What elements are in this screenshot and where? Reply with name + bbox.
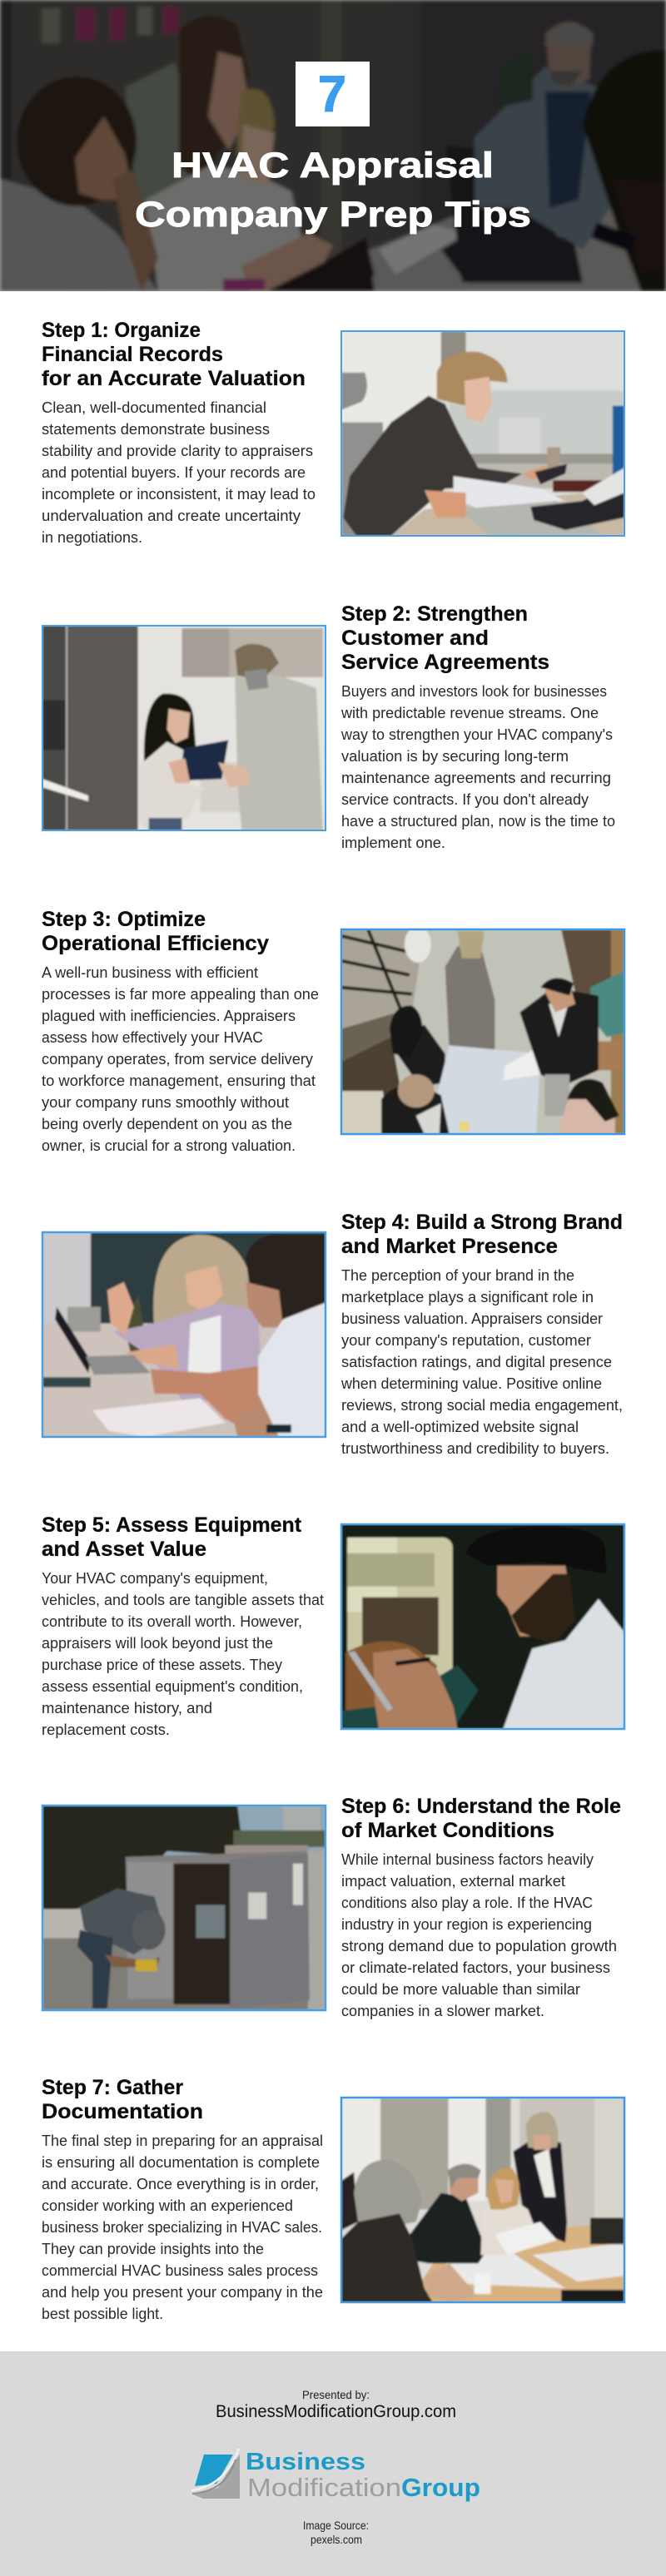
step 2 text: have a structured plan, now is the time to — [341, 813, 615, 830]
step 4 text: when determining value. Positive online — [340, 1375, 602, 1392]
step 6 heading: of Market Conditions — [341, 1819, 554, 1842]
logo: Business Modification Group: Modification — [247, 2473, 401, 2502]
step 5 text: appraisers will look beyond just the — [42, 1635, 273, 1652]
step 2 heading — [341, 602, 549, 674]
step 3 text: your company runs smoothly without — [42, 1094, 289, 1111]
number badge: 7 — [296, 62, 370, 126]
step 4 text: trustworthiness and credibility to buyers. — [341, 1440, 609, 1457]
logo: Business Modification Group: Business — [246, 2449, 365, 2475]
step 6 text — [341, 1851, 617, 2019]
title — [135, 146, 531, 235]
step 1 heading: Step 1: Organize — [42, 319, 201, 342]
title: Company Prep Tips — [135, 195, 531, 235]
step 7 text: and accurate. Once everything is in order, — [42, 2176, 319, 2192]
step 2 text: service contracts. If you don't already — [341, 791, 589, 808]
footer panel — [0, 2351, 666, 2576]
step 3 text: A well-run business with efficient — [42, 964, 258, 981]
image source credit — [303, 2519, 369, 2546]
step 7 text: business broker specializing in HVAC sales. — [42, 2219, 322, 2236]
step 5 heading: and Asset Value — [42, 1538, 206, 1561]
step 5 heading — [42, 1513, 302, 1561]
step 5 text: assess essential equipment's condition, — [42, 1678, 303, 1695]
step 2 heading: Service Agreements — [341, 651, 549, 674]
step 2 heading: Customer and — [341, 627, 489, 650]
step 3 text: company operates, from service delivery — [42, 1051, 313, 1068]
image source credit: Image Source: — [303, 2519, 369, 2532]
step 5 text: purchase price of these assets. They — [42, 1657, 282, 1673]
step 1 text: undervaluation and create uncertainty — [42, 508, 301, 524]
step 1 photo: woman reviewing papers at desk — [341, 331, 624, 536]
step 1 text: statements demonstrate business — [42, 421, 270, 438]
step 5 text — [42, 1570, 324, 1738]
step 6 heading: Step 6: Understand the Role — [341, 1795, 621, 1818]
step 6 text: conditions also play a role. If the HVAC — [341, 1895, 593, 1911]
step 3 text: owner, is crucial for a strong valuation. — [42, 1137, 296, 1154]
step 3 text: being overly dependent on you as the — [42, 1116, 292, 1132]
step 7 text: best possible light. — [42, 2306, 163, 2322]
step 1 text: and potential buyers. If your records are — [42, 464, 306, 481]
step 4 text: your company's reputation, customer — [341, 1332, 591, 1349]
step 2 text: with predictable revenue streams. One — [340, 705, 599, 721]
step 7 text: is ensuring all documentation is complete — [42, 2154, 320, 2171]
logo: Business Modification Group: Group — [401, 2473, 480, 2502]
number badge: 7: 7 — [318, 66, 346, 122]
step 1 text — [42, 399, 316, 546]
step 1 heading: for an Accurate Valuation — [42, 367, 306, 390]
step 4 text: reviews, strong social media engagement, — [341, 1397, 623, 1414]
step 7 text — [42, 2133, 323, 2322]
step 7 text: consider working with an experienced — [42, 2197, 293, 2214]
step 7 heading: Step 7: Gather — [42, 2076, 183, 2099]
step 7 text: and help you present your company in the — [42, 2284, 323, 2301]
step 4 heading: Step 4: Build a Strong Brand — [341, 1211, 623, 1234]
step 4 heading: and Market Presence — [341, 1235, 558, 1258]
presented by: Presented by: — [302, 2388, 370, 2401]
step 2 text: valuation is by securing long-term — [341, 748, 569, 765]
step 5 heading: Step 5: Assess Equipment — [42, 1513, 302, 1537]
step 7 heading: Documentation — [42, 2100, 203, 2123]
step 6 text: While internal business factors heavily — [341, 1851, 594, 1868]
step 1 text: Clean, well-documented financial — [42, 399, 266, 416]
logo: Business Modification Group — [191, 2449, 480, 2502]
step 6 heading — [341, 1795, 621, 1842]
step 4 heading — [341, 1211, 623, 1258]
step 4 text: business valuation. Appraisers consider — [341, 1310, 603, 1327]
step 6 text: companies in a slower market. — [341, 2003, 544, 2019]
step 3 heading: Step 3: Optimize — [42, 908, 206, 931]
hero banner: darkened office team photo — [0, 0, 666, 291]
step 6 text: impact valuation, external market — [341, 1873, 565, 1890]
step 1 heading: Financial Records — [42, 343, 223, 366]
step 1 heading — [42, 319, 306, 390]
step 4 text: satisfaction ratings, and digital presence — [341, 1354, 612, 1370]
step 3 text: plagued with inefficiencies. Appraisers — [42, 1008, 296, 1024]
step 5 text: contribute to its overall worth. However, — [42, 1613, 302, 1630]
step 6 text: could be more valuable than similar — [341, 1981, 580, 1998]
step 3 text: processes is far more appealing than one — [42, 986, 319, 1003]
step 3 photo: overhead view of team around plans — [341, 926, 624, 1134]
step 5 text: Your HVAC company's equipment, — [42, 1570, 268, 1587]
step 5 text: replacement costs. — [42, 1721, 170, 1738]
step 7 text: The final step in preparing for an appraisal — [42, 2133, 323, 2149]
step 3 text: assess how effectively your HVAC — [42, 1029, 263, 1046]
step 3 heading — [42, 908, 269, 955]
step 5 text: vehicles, and tools are tangible assets that — [42, 1592, 324, 1608]
step 7 text: They can provide insights into the — [42, 2241, 264, 2257]
step 2 text — [340, 683, 615, 851]
step 4 text: and a well-optimized website signal — [341, 1419, 579, 1435]
logo icon — [191, 2449, 240, 2499]
step 1 text: in negotiations. — [42, 529, 142, 546]
step 4 text: The perception of your brand in the — [341, 1267, 574, 1284]
image source credit: pexels.com — [311, 2533, 362, 2546]
step 6 text: industry in your region is experiencing — [341, 1916, 592, 1933]
step 6 text: strong demand due to population growth — [341, 1938, 617, 1954]
step 2 text: way to strengthen your HVAC company's — [340, 726, 613, 743]
step 4 text: marketplace plays a significant role in — [341, 1289, 594, 1305]
step 2 heading: Step 2: Strengthen — [341, 602, 528, 626]
step 4 photo: consultant meeting at table — [42, 1232, 326, 1437]
step 3 heading: Operational Efficiency — [42, 932, 269, 955]
step 5 text: maintenance history, and — [42, 1700, 212, 1717]
step 5 photo: technician with clipboard in van — [341, 1524, 624, 1729]
step 1 text: incomplete or inconsistent, it may lead to — [42, 486, 316, 503]
step 2 text: maintenance agreements and recurring — [341, 770, 611, 786]
step 2 text: Buyers and investors look for businesses — [341, 683, 607, 700]
step 3 text: to workforce management, ensuring that — [42, 1073, 316, 1089]
step 2 text: implement one. — [341, 835, 445, 851]
step 2 photo: two people with clipboard — [42, 626, 326, 830]
title: HVAC Appraisal — [171, 146, 494, 186]
step 6 text: or climate-related factors, your business — [341, 1959, 610, 1976]
step 4 text — [340, 1267, 623, 1457]
step 7 heading — [42, 2076, 203, 2123]
presented by: BusinessModificationGroup.com — [216, 2402, 456, 2421]
step 7 photo: team reviewing charts at conference table — [341, 2098, 624, 2302]
step 6 photo: technician servicing rooftop HVAC unit — [42, 1806, 326, 2010]
step 3 text — [42, 964, 319, 1154]
step 1 text: stability and provide clarity to appraisers — [42, 443, 313, 459]
step 7 text: commercial HVAC business sales process — [42, 2262, 318, 2279]
presented by — [216, 2388, 456, 2421]
